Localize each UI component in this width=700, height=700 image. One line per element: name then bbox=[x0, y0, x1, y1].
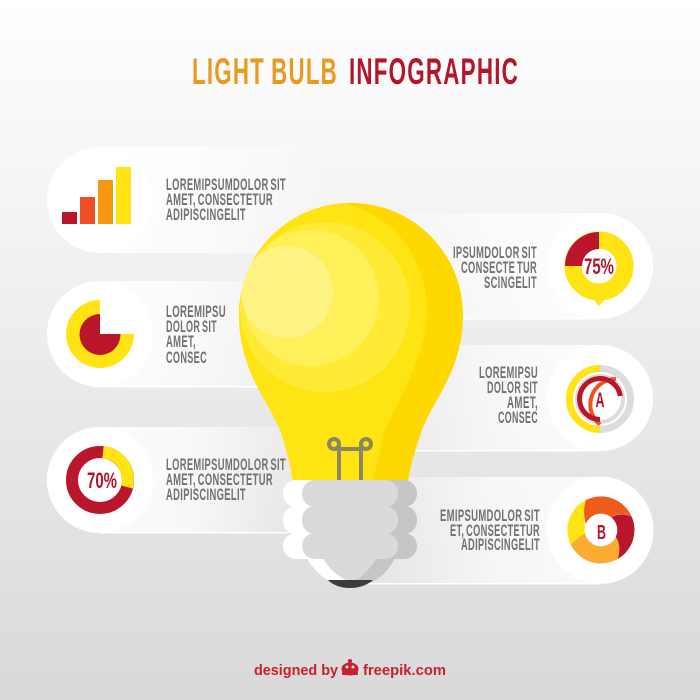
footer credit: designed by bbox=[254, 662, 339, 679]
text block bbox=[166, 456, 286, 504]
text block: DOLOR SIT bbox=[166, 318, 217, 336]
text block: AMET, bbox=[166, 333, 196, 351]
text block: CONSEC bbox=[166, 349, 207, 367]
text block: IPSUMDOLOR SIT bbox=[453, 244, 537, 262]
text block bbox=[440, 507, 540, 554]
text block: AMET, bbox=[507, 394, 538, 412]
text block bbox=[453, 244, 537, 292]
icon: 70% donut bbox=[72, 452, 128, 508]
panel: B swirl pill bbox=[360, 476, 654, 584]
text block: ET, CONSECTETUR bbox=[450, 522, 540, 540]
text block: CONSEC bbox=[498, 409, 538, 427]
panel: bar chart pill bbox=[47, 147, 320, 253]
icon: B swirl bbox=[567, 496, 634, 564]
filament bbox=[329, 439, 371, 482]
icon: 70% donut: 70% bbox=[87, 468, 117, 493]
text block bbox=[479, 364, 538, 427]
screw base bbox=[283, 480, 417, 582]
text block: EMIPSUMDOLOR SIT bbox=[440, 507, 540, 525]
panel: A gauge pill bbox=[390, 345, 653, 452]
bulb glass bbox=[239, 203, 463, 481]
text block: AMET, CONSECTETUR bbox=[166, 191, 273, 209]
text block: AMET, CONSECTETUR bbox=[166, 471, 273, 489]
text block: CONSECTE TUR bbox=[461, 259, 537, 277]
icon: A gauge bbox=[570, 368, 630, 430]
title: LIGHT BULB bbox=[192, 51, 338, 92]
icon: 75% pin bbox=[565, 232, 625, 306]
text block: ADIPISCINGELIT bbox=[166, 486, 246, 504]
panel: 75% pin pill bbox=[370, 213, 653, 320]
text block: LOREMIPSUMDOLOR SIT bbox=[166, 176, 286, 194]
icon: A gauge: A bbox=[596, 389, 604, 412]
icon: freepik logo bbox=[342, 659, 358, 676]
footer credit: freepik.com bbox=[363, 662, 446, 679]
title: INFOGRAPHIC bbox=[349, 51, 519, 92]
text block: ADIPISCINGELIT bbox=[166, 206, 246, 224]
text block: LOREMIPSU bbox=[166, 303, 226, 321]
footer credit bbox=[254, 659, 446, 679]
text block bbox=[166, 176, 286, 224]
panel: 70% donut pill bbox=[47, 427, 300, 534]
icon: bar chart bbox=[62, 167, 131, 224]
panel: pie ring pill bbox=[47, 281, 300, 388]
icon: pie ring bbox=[66, 300, 134, 368]
text block: LOREMIPSUMDOLOR SIT bbox=[166, 456, 286, 474]
text block: DOLOR SIT bbox=[487, 379, 538, 397]
icon: 75% pin: 75% bbox=[584, 254, 614, 279]
text block: SCINGELIT bbox=[484, 274, 537, 292]
text block bbox=[166, 303, 226, 367]
text block: LOREMIPSU bbox=[479, 364, 538, 382]
icon: B swirl: B bbox=[597, 522, 606, 544]
base cap bbox=[328, 580, 373, 588]
light bulb bbox=[230, 195, 470, 588]
text block: ADIPISCINGELIT bbox=[461, 536, 540, 554]
